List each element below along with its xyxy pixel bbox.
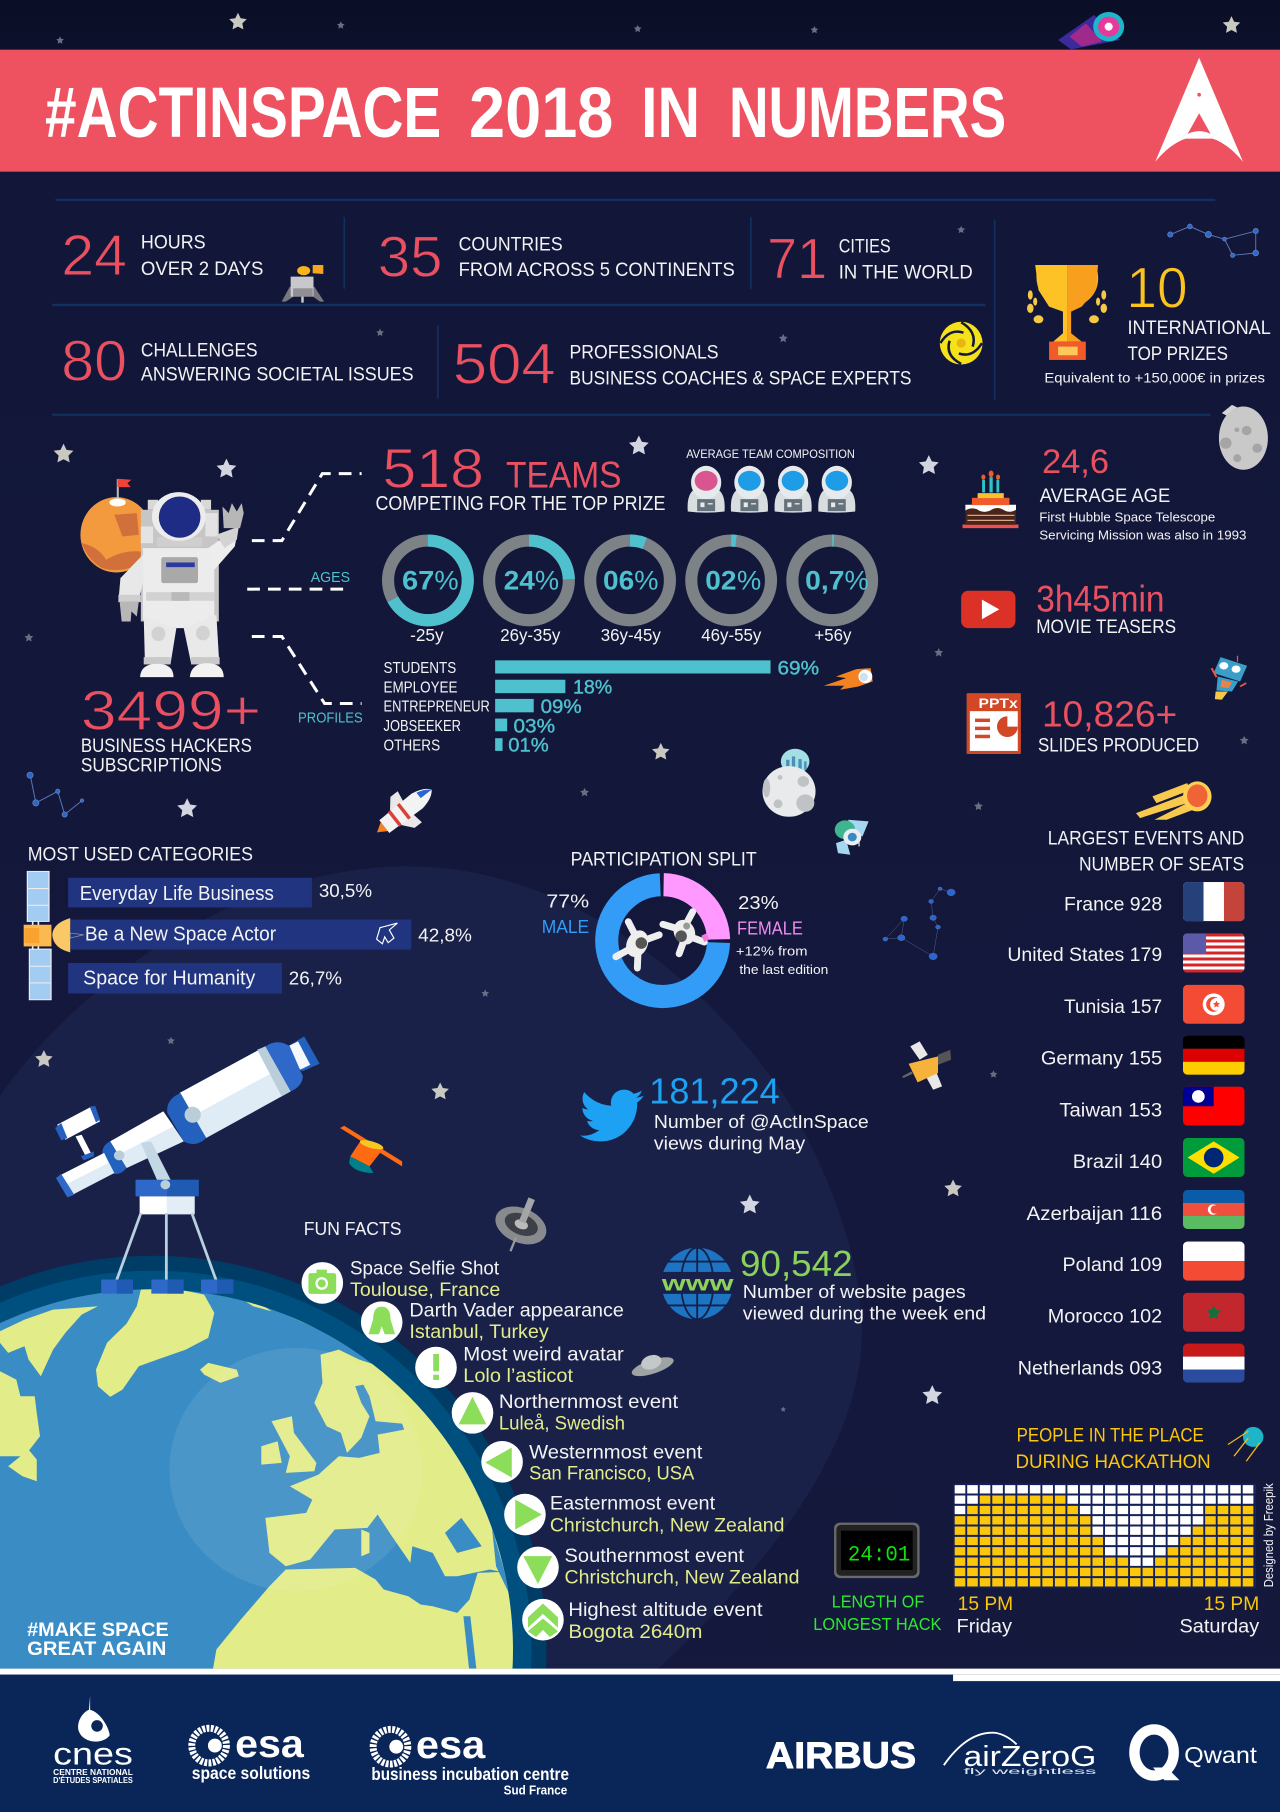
stat: slides produced: SLIDES PRODUCED xyxy=(1038,734,1199,756)
fact: weird avatar: Most weird avatar xyxy=(463,1345,625,1366)
panel: largest events: LARGEST EVENTS AND xyxy=(1048,827,1244,849)
panel: fun facts xyxy=(302,1218,799,1643)
stat: website pages: Number of website pages xyxy=(743,1281,966,1302)
stat: movie teasers: MOVIE TEASERS xyxy=(1036,616,1176,638)
stat: website pages xyxy=(740,1244,986,1323)
bar chart: profiles: JOBSEEKER xyxy=(384,718,461,735)
donut: 0,7%: +56y xyxy=(814,625,852,645)
stat: 3499+ subscriptions: 3499+ xyxy=(81,680,261,742)
fact: darth vader xyxy=(361,1300,624,1343)
fact: highest altitude: Highest altitude event xyxy=(568,1600,763,1621)
bar: everyday life business: Everyday Life Business xyxy=(80,883,274,905)
stat: average age xyxy=(1039,443,1246,542)
bar: be a new space actor: Be a New Space Actor xyxy=(85,923,276,945)
caption: longest hack xyxy=(813,1592,942,1634)
stat: 10 international top prizes: 10 xyxy=(1126,256,1188,320)
panel: largest events: NUMBER OF SEATS xyxy=(1079,854,1244,876)
panel: people in the place: PEOPLE IN THE PLACE xyxy=(1017,1425,1204,1447)
background planet glow xyxy=(0,866,862,1669)
donut: 24%: 24 xyxy=(504,566,535,596)
stat: 504 professionals: 504 xyxy=(453,333,556,397)
stat: slides produced: 10,826+ xyxy=(1042,694,1177,734)
fact: northernmost: Luleå, Swedish xyxy=(499,1414,625,1435)
donut: 67% xyxy=(388,541,468,645)
row: Netherlands: Netherlands 093 xyxy=(1018,1358,1162,1380)
stat: 35 countries: FROM ACROSS 5 CONTINENTS xyxy=(459,260,735,281)
donut: male / female xyxy=(605,883,720,998)
stat: average age: AVERAGE AGE xyxy=(1040,485,1170,507)
panel: most used categories xyxy=(24,843,472,1000)
icon: solar panel satellite xyxy=(24,871,84,1000)
row: Poland: Poland 109 xyxy=(1062,1254,1162,1276)
icon: hat satellite xyxy=(340,1126,402,1173)
footer xyxy=(0,1669,1280,1812)
fact: southernmost xyxy=(517,1546,799,1588)
stat: 3499+ subscriptions: BUSINESS HACKERS xyxy=(81,735,252,757)
icon: digital clock xyxy=(834,1523,920,1578)
panel: largest events xyxy=(1007,827,1245,1383)
bar: everyday life business: 30,5% xyxy=(319,880,372,901)
icon: wheel space station xyxy=(486,1189,556,1261)
stat: 10 international top prizes: TOP PRIZES xyxy=(1128,344,1228,365)
axis label: start xyxy=(957,1594,1013,1637)
stat: website pages: viewed during the week end xyxy=(743,1302,986,1323)
logo: esa space solutions: space solutions xyxy=(192,1763,310,1783)
title: NUMBERS xyxy=(729,73,1006,153)
donut: 0,7%: 0,7 xyxy=(805,566,844,596)
panel: people in the place: DURING HACKATHON xyxy=(1015,1451,1211,1473)
bar chart: profiles: 03% xyxy=(514,715,555,737)
stat: 71 cities: CITIES xyxy=(839,237,891,258)
donut: 02%: % xyxy=(737,566,761,596)
bar: everyday life business xyxy=(68,878,372,907)
fact: easternmost: Christchurch, New Zealand xyxy=(550,1515,784,1536)
slogan: GREAT AGAIN xyxy=(27,1638,166,1660)
stat: twitter views: views during May xyxy=(654,1132,806,1153)
bar: be a new space actor xyxy=(70,920,472,950)
logo: cnes: D'ÉTUDES SPATIALES xyxy=(53,1776,133,1785)
stat: 3499+ subscriptions: SUBSCRIPTIONS xyxy=(81,755,222,777)
icon: floating astronaut right xyxy=(663,909,710,955)
donut: 02% xyxy=(691,541,771,645)
bar chart: profiles: ENTREPRENEUR xyxy=(384,699,490,716)
icon: comet right xyxy=(1136,781,1212,820)
icon: digital clock: 24:01 xyxy=(848,1543,910,1568)
fact: highest altitude xyxy=(522,1599,763,1643)
logo: airzerog: fly weightless xyxy=(963,1767,1096,1776)
donut: 02%: 46y-55y xyxy=(701,625,762,645)
icon: constellation left xyxy=(27,772,84,817)
row: France xyxy=(1064,882,1245,921)
fact: northernmost: Northernmost event xyxy=(499,1392,679,1413)
title banner xyxy=(0,50,1280,172)
panel: most used categories: MOST USED CATEGORIES xyxy=(28,843,253,865)
row: Poland xyxy=(1062,1242,1245,1281)
panel: key figures xyxy=(52,200,1271,415)
stat: twitter views: Number of @ActInSpace xyxy=(654,1111,869,1132)
icon: constellation centre xyxy=(883,887,955,960)
stat: 35 countries xyxy=(378,226,735,290)
stat: 80 challenges: ANSWERING SOCIETAL ISSUES xyxy=(141,365,414,386)
slogan: #MAKE SPACE xyxy=(27,1619,169,1641)
logo: esa bic: Sud France xyxy=(504,1783,567,1797)
fact: weird avatar: Lolo l’asticot xyxy=(463,1366,574,1387)
axis label: start: 15 PM xyxy=(958,1594,1013,1615)
icon: four team astronauts xyxy=(688,466,855,513)
icon: constellation xyxy=(1168,224,1259,257)
logo: qwant xyxy=(1134,1729,1258,1780)
heading: 518 teams xyxy=(375,438,665,515)
icon: www globe xyxy=(658,1248,736,1319)
fact: easternmost: Easternmost event xyxy=(550,1494,716,1515)
stat: 71 cities: 71 xyxy=(767,227,827,291)
continents xyxy=(0,1289,513,1669)
donut: 02%: 02 xyxy=(705,566,736,596)
logo: airbus: AIRBUS xyxy=(766,1735,916,1776)
donut: 67%: % xyxy=(434,566,459,596)
stat: 71 cities xyxy=(767,227,973,291)
title: IN xyxy=(641,73,700,153)
stat: 10 international top prizes: INTERNATIONAL xyxy=(1128,318,1271,339)
caption: longest hack: LENGTH OF xyxy=(832,1592,924,1612)
fact: space selfie xyxy=(302,1259,500,1304)
row: Taiwan: Taiwan 153 xyxy=(1059,1099,1162,1121)
bar chart: profiles: 09% xyxy=(541,696,582,718)
donut: 24%: % xyxy=(535,566,559,596)
heading: 518 teams: TEAMS xyxy=(506,455,622,496)
logo: esa space solutions xyxy=(192,1722,310,1783)
female figure: 23% xyxy=(738,892,779,913)
stat: 3499+ subscriptions xyxy=(81,680,261,777)
donut: 06%: 36y-45y xyxy=(601,625,661,645)
arrows: dashed connectors xyxy=(247,474,362,704)
stat: 24 hours xyxy=(61,224,263,288)
bar chart: profiles xyxy=(384,658,819,756)
icon: unicorn xyxy=(377,923,397,944)
bar chart: profiles: EMPLOYEE xyxy=(384,679,457,696)
bar: be a new space actor: 42,8% xyxy=(418,925,472,946)
stat: 80 challenges: CHALLENGES xyxy=(141,341,258,362)
stat: average age: 24,6 xyxy=(1042,443,1109,481)
donut: 06% xyxy=(590,541,670,645)
stat: 24 hours: 24 xyxy=(61,224,127,288)
title: #ACTINSPACE xyxy=(45,73,441,153)
team composition xyxy=(686,447,855,513)
donut: 0,7%: % xyxy=(844,566,869,596)
icon: yellow satellite xyxy=(902,1041,951,1090)
donut: 67%: 67 xyxy=(402,566,434,596)
slogan xyxy=(27,1619,169,1660)
stat: website pages: 90,542 xyxy=(740,1244,853,1284)
bar chart: profiles: OTHERS xyxy=(384,737,440,754)
female figure xyxy=(736,892,828,977)
fact: northernmost xyxy=(452,1392,679,1435)
stat: 35 countries: COUNTRIES xyxy=(459,235,563,256)
row: Brazil xyxy=(1073,1138,1245,1177)
bar chart: profiles: 69% xyxy=(777,658,819,680)
icon: powerpoint: PPTx xyxy=(978,695,1018,711)
icon: birthday cake xyxy=(963,470,1018,528)
icon: space shuttle xyxy=(365,774,444,848)
fact: space selfie: Toulouse, France xyxy=(350,1280,500,1301)
axis label: start: Friday xyxy=(957,1615,1012,1637)
row: Azerbaijan: Azerbaijan 116 xyxy=(1027,1203,1162,1225)
icon: twitter bird xyxy=(580,1090,644,1141)
row: Netherlands xyxy=(1018,1344,1245,1383)
icon: galaxy xyxy=(940,322,983,364)
icon: youtube xyxy=(961,591,1015,628)
heading: 518 teams: 518 xyxy=(382,438,484,500)
bar chart: profiles: STUDENTS xyxy=(384,660,456,677)
panel: participation split xyxy=(542,848,828,998)
fact: westernmost: Westernmost event xyxy=(529,1442,703,1463)
axis label: end: Saturday xyxy=(1179,1615,1259,1637)
donut: 06%: 06 xyxy=(603,566,634,596)
bar chart: profiles: 18% xyxy=(573,677,612,699)
icon: astronaut with planet xyxy=(80,479,244,677)
panel: fun facts: FUN FACTS xyxy=(304,1218,401,1239)
fact: darth vader: Darth Vader appearance xyxy=(409,1300,624,1321)
axis label: end xyxy=(1179,1594,1259,1637)
bar: space for humanity: Space for Humanity xyxy=(83,968,256,990)
fact: space selfie: Space Selfie Shot xyxy=(350,1259,500,1280)
row: Germany xyxy=(1041,1036,1245,1075)
row: France: France 928 xyxy=(1064,893,1162,915)
icon: lunar lander xyxy=(282,265,324,303)
logo: cnes xyxy=(53,1696,133,1785)
donut: 24%: 26y-35y xyxy=(500,625,561,645)
male figure xyxy=(542,890,589,937)
row: Morocco xyxy=(1048,1293,1245,1332)
icon: www globe: www xyxy=(660,1272,735,1295)
icon: trophy xyxy=(1027,265,1107,360)
icon: moon top right xyxy=(1219,405,1268,470)
fact: southernmost: Southernmost event xyxy=(565,1546,745,1567)
logo: airzerog: airZeroG xyxy=(963,1741,1096,1773)
fact: easternmost xyxy=(504,1494,784,1536)
stat: slides produced xyxy=(1038,694,1199,756)
stat: twitter views xyxy=(649,1072,869,1153)
stat: 24 hours: HOURS xyxy=(141,232,206,253)
title xyxy=(45,73,1006,153)
bar chart: profiles: 01% xyxy=(508,734,549,756)
stat: movie teasers: 3h45min xyxy=(1036,578,1164,619)
label: profiles: PROFILES xyxy=(298,709,363,726)
icon: ufo xyxy=(628,1349,676,1380)
icon: floating astronaut left xyxy=(612,921,659,970)
fact: westernmost: San Francisco, USA xyxy=(529,1464,695,1485)
icon: powerpoint xyxy=(967,693,1021,754)
stat: 10 international top prizes xyxy=(1027,256,1271,385)
logo: esa bic: esa xyxy=(416,1723,486,1767)
icon: small satellite xyxy=(835,820,869,855)
logo: qwant: Qwant xyxy=(1184,1742,1258,1768)
chart: occupancy grid xyxy=(953,1483,1256,1588)
male figure: MALE xyxy=(542,916,589,937)
panel: people in the place xyxy=(953,1425,1263,1637)
stat: average age: First Hubble Space Telescope xyxy=(1039,509,1215,524)
heading: 518 teams: COMPETING FOR THE TOP PRIZE xyxy=(375,493,665,515)
fact: southernmost: Christchurch, New Zealand xyxy=(565,1567,799,1588)
female figure: the last edition xyxy=(739,962,828,977)
stat: 80 challenges: 80 xyxy=(61,330,127,394)
row: United States xyxy=(1007,933,1245,973)
fact: weird avatar xyxy=(415,1345,625,1388)
stat: 24 hours: OVER 2 DAYS xyxy=(141,259,263,280)
donut: 06%: % xyxy=(634,566,658,596)
icon: moon with dome city xyxy=(762,749,816,817)
row: United States: United States 179 xyxy=(1007,944,1162,966)
chart: age donuts xyxy=(388,541,872,645)
stat: 71 cities: IN THE WORLD xyxy=(839,262,973,283)
logo: cnes: cnes xyxy=(53,1737,133,1772)
stat: 504 professionals: PROFESSIONALS xyxy=(570,343,719,364)
icon: ActInSpace logo xyxy=(1155,58,1243,162)
bar: space for humanity: 26,7% xyxy=(289,968,342,989)
logo: esa bic xyxy=(371,1723,569,1797)
panel: participation split: PARTICIPATION SPLIT xyxy=(571,848,757,870)
stat: 10 international top prizes: Equivalent to +150,000€ in prizes xyxy=(1044,369,1265,385)
row: Taiwan xyxy=(1059,1087,1245,1126)
logo: esa bic: business incubation centre xyxy=(371,1764,569,1784)
title: 2018 xyxy=(469,73,613,153)
stat: average age: Servicing Mission was also in 1993 xyxy=(1039,527,1246,542)
row: Azerbaijan xyxy=(1027,1190,1245,1229)
credit: Designed by Freepik xyxy=(1262,1483,1276,1587)
logo: esa space solutions: esa xyxy=(235,1722,305,1766)
illustration: earth xyxy=(0,1256,546,1669)
bar: space for humanity xyxy=(68,963,342,994)
icon: fireball xyxy=(824,668,873,690)
logo: airzerog xyxy=(944,1733,1096,1776)
stat: movie teasers xyxy=(1036,578,1176,638)
fact: highest altitude: Bogota 2640m xyxy=(568,1622,702,1643)
fact: westernmost xyxy=(481,1441,703,1485)
donut: 24% xyxy=(489,541,569,645)
donut: 0,7% xyxy=(792,541,872,645)
row: Morocco: Morocco 102 xyxy=(1048,1306,1162,1328)
label: ages: AGES xyxy=(311,569,350,586)
axis label: end: 15 PM xyxy=(1204,1594,1259,1615)
stat: 504 professionals xyxy=(453,333,911,397)
icon: comet top xyxy=(1058,12,1124,49)
row: Tunisia xyxy=(1064,985,1245,1024)
icon: sputnik xyxy=(1228,1427,1263,1461)
stat: 35 countries: 35 xyxy=(378,226,442,290)
male figure: 77% xyxy=(546,890,589,911)
donut: 67%: -25y xyxy=(410,625,444,645)
team composition: AVERAGE TEAM COMPOSITION xyxy=(686,447,855,461)
row: Germany: Germany 155 xyxy=(1041,1048,1162,1070)
caption: longest hack: LONGEST HACK xyxy=(813,1614,942,1634)
female figure: +12% from xyxy=(736,944,808,959)
row: Brazil: Brazil 140 xyxy=(1073,1151,1162,1173)
stat: 80 challenges xyxy=(61,330,414,394)
stat: 504 professionals: BUSINESS COACHES & SPACE EXPERTS xyxy=(570,369,911,390)
row: Tunisia: Tunisia 157 xyxy=(1064,996,1162,1018)
fact: darth vader: Istanbul, Turkey xyxy=(409,1322,549,1343)
logo: cnes: CENTRE NATIONAL xyxy=(53,1768,133,1777)
stars xyxy=(24,13,1249,1412)
female figure: FEMALE xyxy=(737,918,803,939)
icon: telescope xyxy=(55,1036,320,1294)
icon: robot xyxy=(1212,656,1247,700)
stat: twitter views: 181,224 xyxy=(649,1072,780,1112)
